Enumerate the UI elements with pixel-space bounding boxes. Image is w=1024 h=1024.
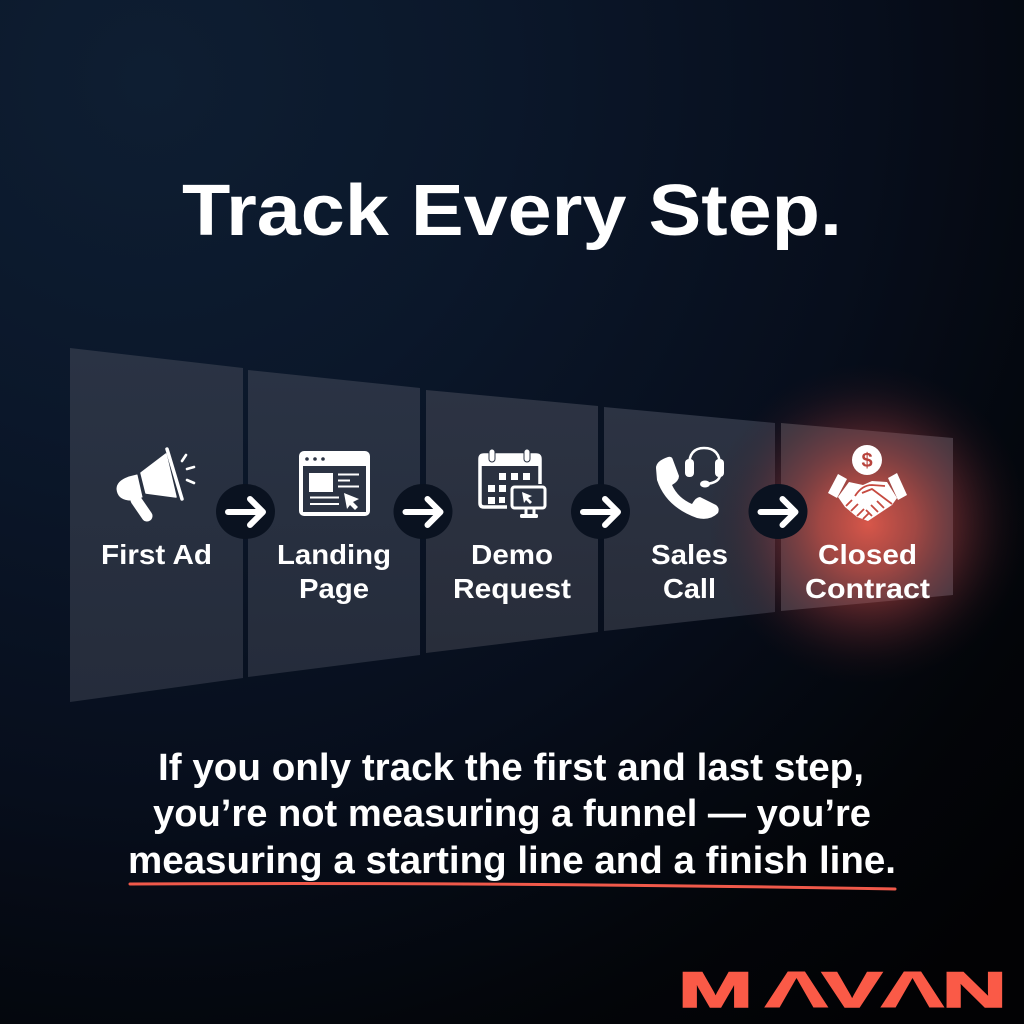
arrow connector 4 xyxy=(748,484,808,539)
step: first ad xyxy=(101,449,212,570)
step: landing page xyxy=(277,451,391,604)
label: landing page: Landing xyxy=(277,539,391,570)
label: closed contract xyxy=(805,539,930,604)
label: sales call: Sales xyxy=(651,539,728,570)
icon: phone and headset xyxy=(656,448,724,519)
panel: closed contract xyxy=(781,423,953,611)
step: demo request xyxy=(453,449,571,604)
panel: landing page xyxy=(248,370,420,677)
label: demo request xyxy=(453,539,571,604)
arrow connector 2 xyxy=(394,484,452,539)
arrow connector 1 xyxy=(216,484,275,539)
icon: handshake with dollar coin: $ xyxy=(861,450,873,472)
label: sales call xyxy=(651,539,728,604)
red glow xyxy=(708,364,1024,684)
label: sales call: Call xyxy=(663,573,716,604)
panel: first ad xyxy=(70,348,243,702)
closing statement: measuring a starting line and a finish line. xyxy=(128,840,896,882)
label: demo request: Request xyxy=(453,573,571,604)
arrow connector 3 xyxy=(571,484,630,539)
panel: sales call xyxy=(604,407,775,631)
title: Track Every Step. xyxy=(182,171,842,251)
icon: browser window xyxy=(299,451,370,516)
label: closed contract: Closed xyxy=(818,539,917,570)
icon: megaphone xyxy=(117,449,194,516)
closing statement: you’re not measuring a funnel — you’re xyxy=(153,793,871,835)
label: landing page xyxy=(277,539,391,604)
label: first ad: First Ad xyxy=(101,539,212,570)
panel: demo request xyxy=(426,390,598,653)
closing statement: If you only track the first and last step, xyxy=(158,747,864,789)
icon: handshake with dollar coin xyxy=(828,445,907,521)
label: demo request: Demo xyxy=(471,539,553,570)
label: landing page: Page xyxy=(299,573,369,604)
icon: calendar with monitor xyxy=(480,449,545,518)
logo: MAVAN: MAVAN xyxy=(678,962,1007,1018)
step: closed contract xyxy=(805,445,930,604)
step: sales call xyxy=(651,448,728,604)
label: closed contract: Contract xyxy=(805,573,930,604)
closing statement xyxy=(128,747,896,882)
red underline xyxy=(130,884,895,889)
funnel panels xyxy=(70,348,1024,702)
